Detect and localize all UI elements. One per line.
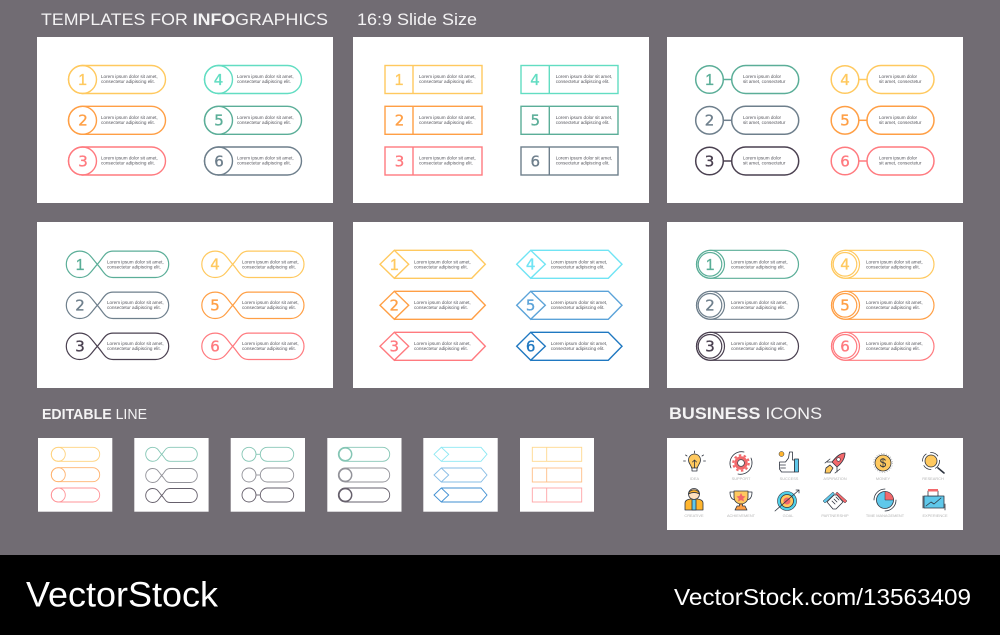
footer url: VectorStock.com/13563409 [674, 584, 971, 610]
item 4 [517, 250, 622, 278]
item 5 [521, 106, 618, 134]
item 5 [832, 291, 934, 319]
icon: achievement [730, 491, 752, 510]
item 4: Lorem ipsum dolor sit amet, [866, 260, 923, 264]
item 6 [521, 147, 618, 175]
item 5: consectetur adipiscing elit. [866, 305, 920, 310]
item 1: consectetur adipiscing elit. [731, 264, 785, 270]
thumbnail: figure-eight loops [134, 438, 209, 512]
heading: business icons: BUSINESS ICONS [669, 404, 822, 423]
item 6 [832, 332, 934, 360]
item 2: Lorem ipsum dolor [743, 115, 782, 120]
item 6 [204, 147, 302, 175]
item 3: consectetur adipiscing elit. [731, 346, 785, 351]
label: experience: EXPERIENCE [922, 513, 948, 518]
item 3: 3 [78, 152, 88, 170]
item 2 [696, 106, 799, 134]
item 1: 1 [395, 72, 403, 89]
item 3: 3 [390, 338, 399, 356]
item 5 [831, 106, 934, 134]
item 5: 5 [526, 297, 535, 315]
thumbnail: rectangles [520, 438, 594, 512]
item 3: 3 [75, 338, 85, 356]
item 5: consectetur adipiscing elit. [551, 305, 605, 310]
item 2 [380, 291, 485, 319]
item 6: Lorem ipsum dolor sit amet, [237, 156, 294, 161]
item 3: consectetur adipiscing elit. [414, 346, 468, 351]
item 1: 1 [705, 72, 714, 89]
item 3 [66, 333, 169, 360]
item 5: consectetur adipiscing elit. [556, 120, 610, 125]
panel: overlapping circle pills [37, 37, 333, 203]
item 4: Lorem ipsum dolor sit amet, [242, 260, 299, 264]
item 4: consectetur adipiscing elit. [242, 264, 296, 270]
item 2: 2 [395, 112, 404, 130]
item 3 [380, 332, 485, 360]
thumbnail: double-ring pills [327, 438, 402, 512]
item 6: 6 [214, 152, 224, 170]
label: research: RESEARCH [922, 476, 944, 481]
icon: time management [874, 489, 896, 511]
label: goal: GOAL [783, 513, 794, 518]
icon: partnership [823, 492, 847, 509]
item 3: Lorem ipsum dolor sit amet, [414, 341, 471, 346]
item 6: Lorem ipsum dolor sit amet, [866, 341, 923, 346]
item 2: 2 [75, 297, 85, 315]
item 3: 3 [705, 152, 714, 170]
item 3: Lorem ipsum dolor [743, 156, 782, 161]
label: idea: IDEA [690, 476, 699, 481]
item 2: consectetur adipiscing elit. [414, 305, 468, 310]
item 2 [385, 106, 482, 134]
icon: money: $ [880, 458, 887, 470]
item 5: Lorem ipsum dolor sit amet, [237, 115, 294, 120]
item 6: Lorem ipsum dolor [879, 156, 918, 161]
item 5: 5 [214, 112, 224, 130]
item 6 [517, 332, 622, 360]
label: success: SUCCESS [780, 476, 799, 481]
item 5 [204, 106, 302, 134]
item 4: consectetur adipiscing elit. [556, 79, 610, 84]
icon: experience [923, 489, 945, 510]
item 6: 6 [531, 152, 540, 170]
item 2: 2 [78, 112, 88, 130]
item 5: Lorem ipsum dolor sit amet, [242, 300, 299, 305]
item 6: 6 [210, 338, 220, 356]
item 2: consectetur adipiscing elit. [731, 305, 785, 310]
item 1: Lorem ipsum dolor sit amet, [731, 260, 788, 264]
item 5: 5 [840, 297, 850, 315]
item 4 [832, 250, 934, 278]
item 1 [385, 66, 482, 94]
item 2: Lorem ipsum dolor sit amet, [414, 300, 471, 305]
item 1: Lorem ipsum dolor sit amet, [101, 74, 158, 79]
item 3: Lorem ipsum dolor sit amet, [107, 341, 164, 346]
item 1 [696, 66, 799, 94]
item 4: 4 [214, 71, 223, 89]
item 4: Lorem ipsum dolor [879, 74, 918, 79]
panel: circles connected to pills [667, 37, 963, 203]
item 6: Lorem ipsum dolor sit amet, [551, 341, 607, 346]
item 4: 4 [840, 256, 850, 274]
icon: support [730, 452, 752, 474]
item 3: consectetur adipiscing elit. [419, 161, 473, 166]
thumbnail: connected circles [231, 438, 305, 512]
item 5: sit amet, consectetur [879, 120, 922, 125]
item 6: 6 [840, 152, 850, 170]
panel: rectangles [353, 37, 649, 203]
item 3 [696, 332, 798, 360]
item 6: 6 [840, 338, 850, 356]
item 4: Lorem ipsum dolor sit amet, [237, 74, 294, 79]
item 1: Lorem ipsum dolor sit amet, [419, 74, 476, 79]
item 1: 1 [78, 72, 87, 89]
item 4: 4 [210, 256, 220, 274]
item 4: 4 [530, 71, 540, 89]
icon: idea [684, 451, 706, 471]
item 1: sit amet, consectetur [743, 79, 786, 84]
title: templates for infographics: TEMPLATES FOR INFOGRAPHICS [41, 10, 328, 29]
label: time management: TIME MANAGEMENT [866, 513, 905, 518]
icon: research [922, 452, 944, 473]
item 5 [517, 291, 622, 319]
item 3: Lorem ipsum dolor sit amet, [101, 156, 158, 161]
panel: double-ring pills [667, 222, 963, 388]
item 6: consectetur adipiscing elit. [242, 346, 296, 351]
item 1 [66, 251, 169, 278]
icon: aspiration [825, 453, 845, 473]
item 5: Lorem ipsum dolor [879, 115, 918, 120]
item 3 [385, 147, 482, 175]
item 6: Lorem ipsum dolor sit amet, [556, 156, 612, 161]
heading: editable line: EDITABLE LINE [42, 406, 147, 423]
thumbnail: diamonds and hexagons [423, 438, 498, 512]
item 4: consectetur adipiscing elit. [551, 264, 605, 270]
item 2: consectetur adipiscing elit. [107, 305, 161, 310]
item 5: consectetur adipiscing elit. [242, 305, 296, 310]
item 2: 2 [705, 112, 714, 130]
item 1: consectetur adipiscing elit. [414, 264, 468, 270]
item 5: Lorem ipsum dolor sit amet, [866, 300, 923, 305]
item 6: sit amet, consectetur [879, 161, 922, 166]
item 2: 2 [705, 297, 715, 315]
item 1: Lorem ipsum dolor sit amet, [107, 260, 164, 264]
item 6: consectetur adipiscing elit. [237, 161, 291, 166]
label: aspiration: ASPIRATION [823, 476, 847, 481]
item 1: 1 [390, 257, 399, 274]
label: creative: CREATIVE [684, 513, 704, 518]
panel: diamonds and hexagons [353, 222, 649, 388]
item 3: Lorem ipsum dolor sit amet, [419, 156, 476, 161]
item 3 [68, 147, 166, 175]
item 3: Lorem ipsum dolor sit amet, [731, 341, 788, 346]
item 4 [831, 66, 934, 94]
item 2: Lorem ipsum dolor sit amet, [731, 300, 788, 305]
item 5: 5 [840, 112, 850, 130]
item 3: sit amet, consectetur [743, 161, 786, 166]
item 1 [380, 250, 485, 278]
label: partnership: PARTNERSHIP [821, 513, 849, 518]
item 1: consectetur adipiscing elit. [419, 79, 473, 84]
panel: business icons [667, 438, 963, 530]
item 2: consectetur adipiscing elit. [101, 120, 155, 125]
item 1: Lorem ipsum dolor [743, 74, 782, 79]
item 5: consectetur adipiscing elit. [237, 120, 291, 125]
item 4 [204, 66, 302, 94]
item 4: sit amet, consectetur [879, 79, 922, 84]
item 2: sit amet, consectetur [743, 120, 786, 125]
item 3: 3 [395, 152, 404, 170]
item 4: consectetur adipiscing elit. [237, 79, 291, 84]
item 2: 2 [390, 297, 399, 315]
item 1: 1 [706, 257, 714, 274]
item 3 [696, 147, 799, 175]
item 5: 5 [210, 297, 220, 315]
item 6: consectetur adipiscing elit. [556, 161, 610, 166]
footer logo: VectorStock [26, 576, 219, 614]
item 1: consectetur adipiscing elit. [107, 264, 161, 270]
item 6: consectetur adipiscing elit. [866, 346, 920, 351]
panel: figure-eight loops [37, 222, 333, 388]
icon: success [779, 452, 798, 472]
item 4: consectetur adipiscing elit. [866, 264, 920, 270]
icon: money [874, 454, 892, 472]
item 1 [696, 250, 798, 278]
item 6: 6 [526, 338, 535, 356]
item 1: 1 [76, 257, 84, 274]
item 1 [68, 66, 166, 94]
item 6 [831, 147, 934, 175]
item 4 [521, 66, 618, 94]
item 3: 3 [705, 338, 715, 356]
item 2 [696, 291, 798, 319]
item 5: Lorem ipsum dolor sit amet, [551, 300, 607, 305]
item 5: 5 [531, 112, 540, 130]
item 1: Lorem ipsum dolor sit amet, [414, 260, 471, 264]
item 4: 4 [840, 71, 850, 89]
item 6: consectetur adipiscing elit. [551, 346, 605, 351]
item 5 [202, 292, 304, 318]
item 2 [68, 106, 166, 134]
item 4: Lorem ipsum dolor sit amet, [551, 260, 607, 264]
item 2: Lorem ipsum dolor sit amet, [419, 115, 476, 120]
item 4: Lorem ipsum dolor sit amet, [556, 74, 612, 79]
subtitle: slide size: 16:9 Slide Size [357, 10, 477, 29]
item 4 [202, 251, 304, 278]
item 3: consectetur adipiscing elit. [101, 161, 155, 166]
item 3: consectetur adipiscing elit. [107, 346, 161, 351]
label: money: MONEY [876, 476, 891, 481]
thumbnail: overlapping circle pills [38, 438, 112, 512]
icon: goal [775, 490, 799, 511]
item 2: Lorem ipsum dolor sit amet, [101, 115, 158, 120]
item 5: Lorem ipsum dolor sit amet, [556, 115, 612, 120]
item 2 [66, 292, 169, 318]
label: support: SUPPORT [732, 476, 751, 481]
item 4: 4 [526, 256, 535, 274]
icon: creative [685, 488, 703, 510]
item 6 [202, 333, 304, 360]
item 2: consectetur adipiscing elit. [419, 120, 473, 125]
item 1: consectetur adipiscing elit. [101, 79, 155, 84]
item 6: Lorem ipsum dolor sit amet, [242, 341, 299, 346]
item 2: Lorem ipsum dolor sit amet, [107, 300, 164, 305]
label: achievement: ACHIEVEMENT [727, 513, 756, 518]
footer bar [0, 555, 1000, 635]
